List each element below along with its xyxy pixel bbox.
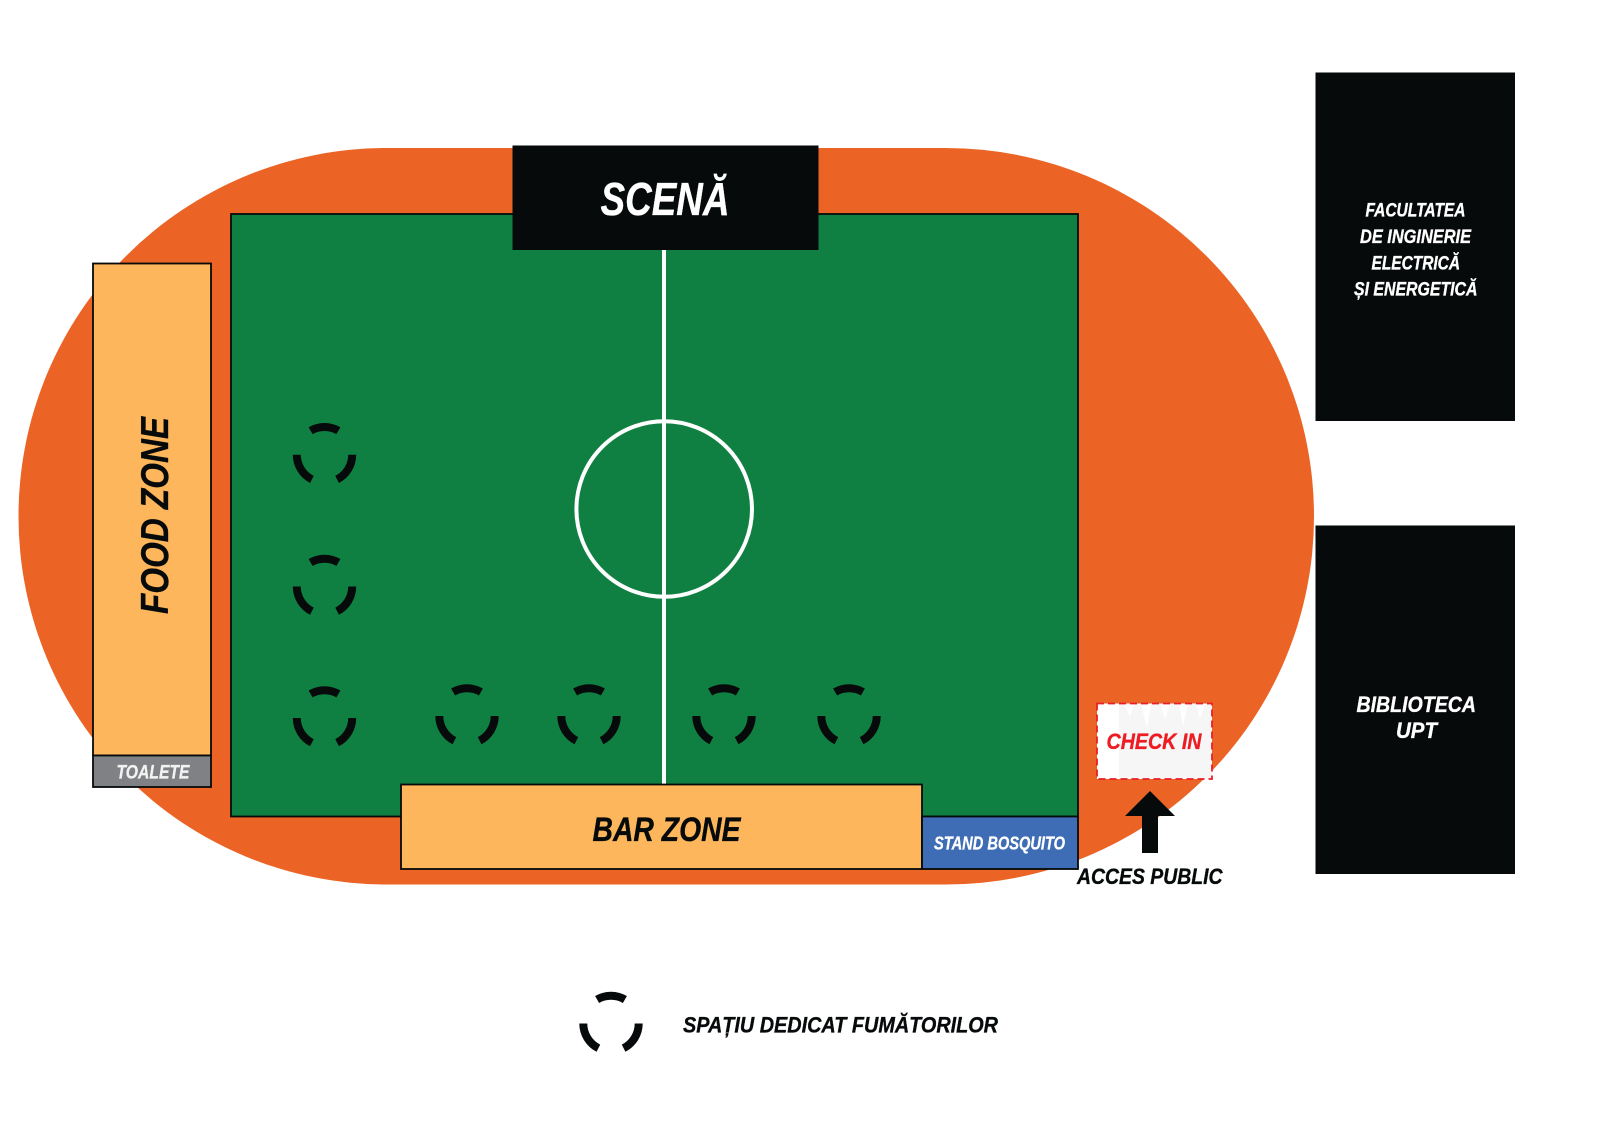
text: library name: BIBLIOTECA bbox=[1356, 692, 1476, 717]
icon: legend smoking symbol bbox=[583, 996, 639, 1048]
label: public access: ACCES PUBLIC bbox=[1076, 864, 1223, 889]
text: library name: UPT bbox=[1396, 718, 1438, 743]
panel: green field bbox=[231, 214, 1078, 816]
text: faculty name: FACULTATEA bbox=[1366, 200, 1466, 222]
heading: food zone label: FOOD ZONE bbox=[134, 416, 177, 614]
label: Bosquito stand: STAND BOSQUITO bbox=[934, 834, 1065, 854]
panel: faculty building bbox=[1316, 72, 1515, 421]
panel: food zone bbox=[93, 264, 211, 756]
icon: smoking area 3 bbox=[297, 690, 352, 743]
panel: Bosquito stand bbox=[922, 816, 1078, 869]
heading: bar zone label: BAR ZONE bbox=[592, 811, 742, 849]
heading: stage label: SCENĂ bbox=[600, 173, 730, 225]
text: faculty name: ELECTRICĂ bbox=[1372, 252, 1460, 274]
icon: smoking area 2 bbox=[297, 559, 352, 611]
panel: toilets bbox=[93, 756, 211, 787]
panel: check in bbox=[1097, 704, 1212, 779]
panel: orange running track bbox=[18, 148, 1314, 884]
panel: library building bbox=[1316, 526, 1515, 874]
text: library name bbox=[1356, 692, 1476, 743]
label: legend text: SPAȚIU DEDICAT FUMĂTORILOR bbox=[683, 1012, 999, 1038]
label: toilets: TOALETE bbox=[116, 762, 190, 784]
icon: smoking area 6 bbox=[696, 688, 752, 741]
text: faculty name: ȘI ENERGETICĂ bbox=[1354, 278, 1478, 300]
icon: smoking area 5 bbox=[561, 688, 617, 741]
panel: stage bbox=[512, 146, 818, 250]
icon: smoking area 4 bbox=[439, 688, 495, 741]
text: faculty name bbox=[1354, 200, 1478, 300]
arrow: public access bbox=[1125, 791, 1175, 853]
panel: bar zone bbox=[401, 784, 922, 869]
icon: smoking area 7 bbox=[821, 688, 877, 741]
label: check in: CHECK IN bbox=[1106, 729, 1202, 754]
text: faculty name: DE INGINERIE bbox=[1360, 227, 1472, 248]
legend: smoking area bbox=[583, 996, 999, 1048]
icon: smoking area 1 bbox=[297, 427, 352, 479]
